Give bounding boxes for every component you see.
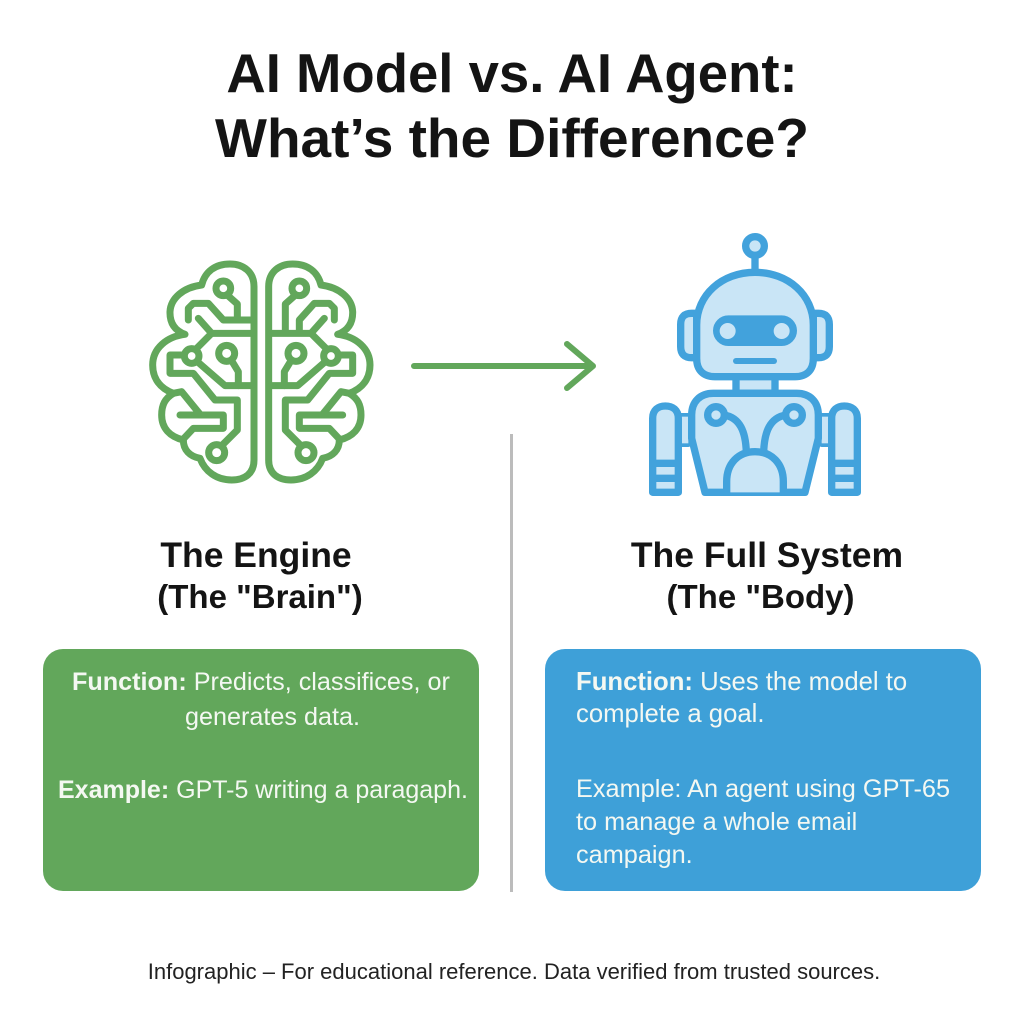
text: model function continued: generates data. <box>185 703 360 731</box>
text: model function: Function: Predicts, classifices, or <box>72 668 450 696</box>
text: agent example: Example: An agent using GPT-65 <box>576 775 950 803</box>
heading: the full system: (The "Body) <box>667 578 854 615</box>
text: agent example <box>576 775 950 869</box>
title: What’s the Difference? <box>215 107 809 169</box>
heading: the full system: The Full System <box>631 535 903 575</box>
heading: the engine: (The "Brain") <box>157 578 363 615</box>
footer note: Infographic – For educational reference. Data verified from trusted sources. <box>148 959 880 984</box>
text: agent function <box>576 668 907 728</box>
heading: the engine <box>157 535 363 615</box>
divider line <box>510 434 513 892</box>
title: AI Model vs. AI Agent: <box>226 43 798 104</box>
text: agent example: to manage a whole email <box>576 808 857 836</box>
text: agent function: Function: Uses the model to <box>576 668 907 696</box>
text: agent function: complete a goal. <box>576 700 764 728</box>
title <box>215 43 809 169</box>
panel: model details <box>43 649 479 891</box>
panel: agent details <box>545 649 981 891</box>
text: model example: Example: GPT-5 writing a paragaph. <box>58 776 468 804</box>
heading: the full system <box>631 535 903 615</box>
text: agent example: campaign. <box>576 841 693 869</box>
heading: the engine: The Engine <box>160 535 352 575</box>
